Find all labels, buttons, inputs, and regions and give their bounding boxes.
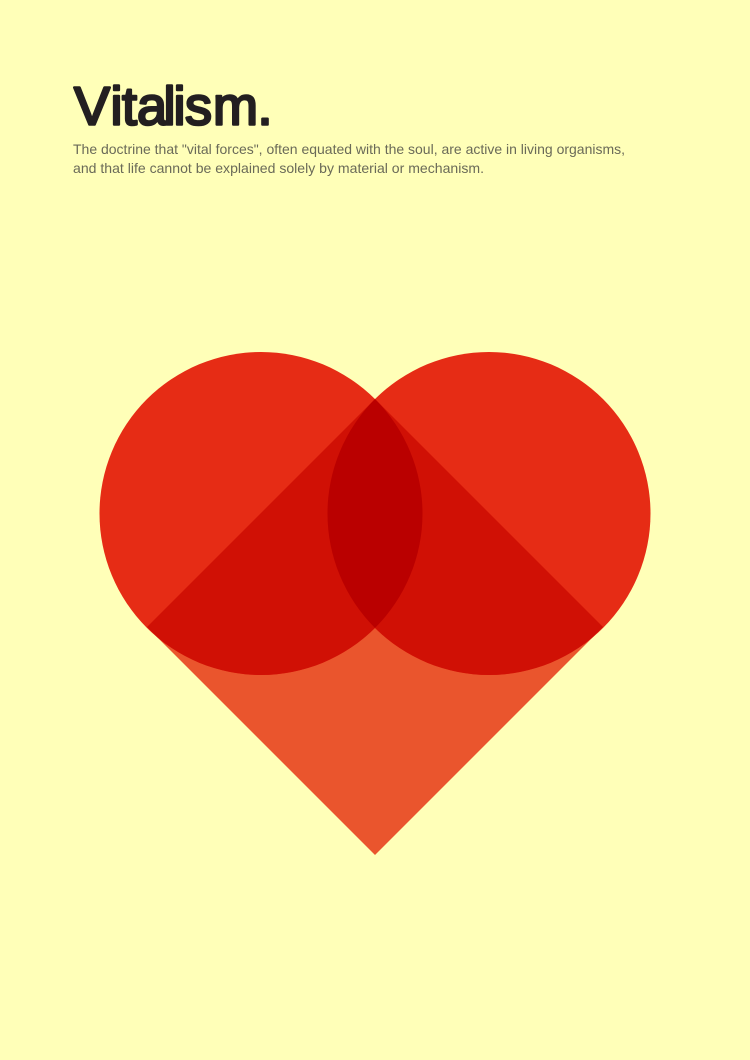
left circle: [100, 352, 422, 675]
heart diagram: [100, 352, 650, 855]
description text: [73, 142, 625, 176]
description text: The doctrine that "vital forces", often equated with the soul, are active in living organisms,: [73, 142, 625, 157]
diamond square: [147, 399, 603, 855]
title: Vitalism.: [74, 76, 273, 136]
poster: [73, 84, 650, 855]
central lens overlap: [328, 399, 422, 628]
right circle: [328, 352, 650, 675]
circle and diamond overlap: [147, 399, 603, 675]
description text: and that life cannot be explained solely by material or mechanism.: [73, 161, 484, 176]
